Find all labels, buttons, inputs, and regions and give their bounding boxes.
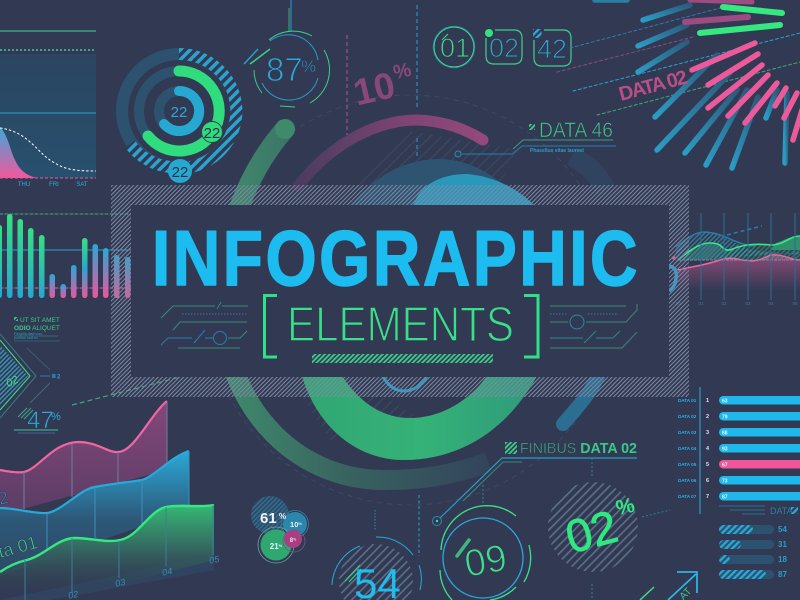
area chart: right: 03	[745, 301, 751, 306]
donut chart: 22	[172, 164, 188, 181]
area chart: right	[669, 213, 800, 306]
text block: UT SIT AMET: Fringilla diam nec,	[14, 332, 43, 336]
dashed verticals near 10%	[347, 5, 417, 158]
text block: UT SIT AMET	[14, 317, 60, 341]
diamond: 02: 2	[57, 374, 61, 380]
horizontal bar table: DATA 01	[678, 398, 697, 403]
horizontal bar table: 73	[722, 478, 728, 484]
label: DATA 46: DATA 46	[539, 119, 613, 142]
area charts: bottom left	[0, 401, 221, 600]
label: DATA 46: Phasellus vitae laoreet	[530, 148, 584, 154]
diamond: 02: 02	[4, 374, 20, 390]
horizontal bar table: DATA 04	[678, 446, 697, 451]
label: FINIBUS DATA 02 with connector: FINIBUS DATA 02	[520, 441, 637, 457]
area charts: bottom left: 05	[208, 554, 221, 566]
subtitle: ELEMENTS: ELEMENTS	[287, 298, 514, 352]
label: DATA 02: DATA 02	[617, 66, 690, 106]
subtitle bracket: right	[524, 296, 538, 357]
horizontal bar table: 63	[722, 398, 728, 404]
number badge: 01: 01	[440, 33, 470, 63]
diamond: 02	[0, 334, 61, 418]
horizontal bar table: DATA 07	[678, 494, 697, 499]
gauge: 47%	[14, 407, 61, 434]
number badge: 02: 02	[489, 33, 519, 63]
label: FINIBUS DATA 02 with connector	[432, 441, 637, 600]
progress bars: 31	[778, 540, 787, 549]
horizontal bar table: DATA 02	[678, 414, 697, 419]
chart: top-left area: THU	[18, 182, 30, 188]
progress bars: 18	[778, 555, 787, 564]
progress bars: 87	[778, 570, 787, 579]
gauge: 47%: %	[51, 411, 61, 423]
horizontal bar table: 1	[706, 398, 709, 404]
gauge: 09	[440, 506, 531, 600]
chart: top-left area: SAT	[76, 182, 88, 188]
horizontal bar table: 7	[706, 494, 709, 500]
area chart: right: 02	[721, 301, 727, 306]
label: 10%: 10	[349, 64, 399, 113]
number badge: 42	[533, 29, 571, 66]
burst chart	[557, 0, 800, 168]
number badge: 01	[433, 26, 475, 68]
central rings and arcs	[205, 95, 615, 505]
title: INFOGRAPHIC: INFOGRAPHIC	[152, 216, 640, 302]
gauge: 54	[332, 495, 421, 600]
horizontal bar table: DATA 03	[678, 430, 697, 435]
area charts: bottom left: 04	[161, 566, 173, 578]
gauge: 87%: 87	[266, 51, 303, 88]
horizontal bar table: 2	[706, 414, 709, 420]
label: DATA 46	[455, 119, 616, 157]
progress bars: 54	[778, 525, 787, 534]
gauge: 02%: 02	[560, 500, 623, 563]
horizontal bar table: 5	[706, 462, 709, 468]
horizontal bar table: 93	[722, 446, 728, 452]
bubble chart: %	[298, 521, 302, 526]
horizontal bar table: 79	[722, 414, 728, 420]
chart: top-left area	[0, 31, 96, 188]
horizontal bar table: DATA 05	[678, 462, 697, 467]
number badge: 02	[485, 29, 522, 64]
horizontal bar table: 4	[706, 446, 710, 452]
text block: UT SIT AMET: porttitor sed ex	[14, 336, 38, 340]
horizontal bar table: 6	[706, 478, 709, 484]
area chart: right: 00	[675, 301, 681, 306]
horizontal bar table: 87	[722, 494, 728, 500]
horizontal bar table: DATA	[770, 506, 793, 516]
subtitle bracket: left	[264, 296, 277, 357]
circuit lines: left	[161, 302, 248, 348]
horizontal bar table	[678, 387, 800, 516]
gauge: 47%: 47	[27, 407, 54, 434]
progress bars	[719, 525, 787, 579]
text block: UT SIT AMET: UT SIT AMET	[20, 317, 60, 324]
bubble chart: %	[279, 543, 283, 548]
horizontal bar table: 88	[722, 430, 728, 436]
bubble chart	[251, 496, 308, 563]
donut chart	[122, 54, 236, 183]
area chart: right: 04	[768, 301, 774, 306]
gauge: 02%	[548, 482, 670, 572]
bar chart: left	[0, 214, 131, 298]
chart: top-left area: FRI	[49, 182, 59, 188]
label: 10%: %	[391, 59, 414, 84]
gauge: 09: 09	[461, 537, 510, 586]
bubble chart: %	[293, 538, 297, 542]
area chart: right: 05	[792, 301, 798, 306]
bubble chart: 10	[290, 520, 298, 529]
text block: UT SIT AMET: ODIO ALIQUET	[14, 325, 60, 332]
donut chart: 22	[171, 104, 187, 121]
hatched underline	[312, 354, 493, 363]
gauge: 87%: %	[301, 57, 316, 76]
hatched title frame	[111, 185, 689, 397]
area chart: right: 01	[698, 301, 704, 306]
bubble chart: 21	[270, 542, 279, 551]
dashed line lower left	[72, 377, 180, 405]
circuit lines: right	[550, 304, 637, 348]
title panel	[131, 205, 669, 377]
horizontal bar table: DATA 06	[678, 478, 697, 483]
bubble chart: 61	[260, 510, 277, 527]
horizontal bar table: 67	[722, 462, 728, 468]
bubble chart: 8	[290, 538, 293, 544]
area charts: bottom left: 03	[114, 577, 126, 589]
gauge: 87%	[244, 0, 330, 107]
arrow	[640, 572, 697, 600]
number badge: 42: 42	[537, 34, 567, 64]
label: 10%	[349, 59, 418, 113]
gauge: 02%: %	[614, 494, 637, 520]
donut chart: 22	[204, 125, 220, 142]
horizontal bar table: 3	[706, 430, 709, 436]
bubble chart: %	[279, 512, 286, 521]
